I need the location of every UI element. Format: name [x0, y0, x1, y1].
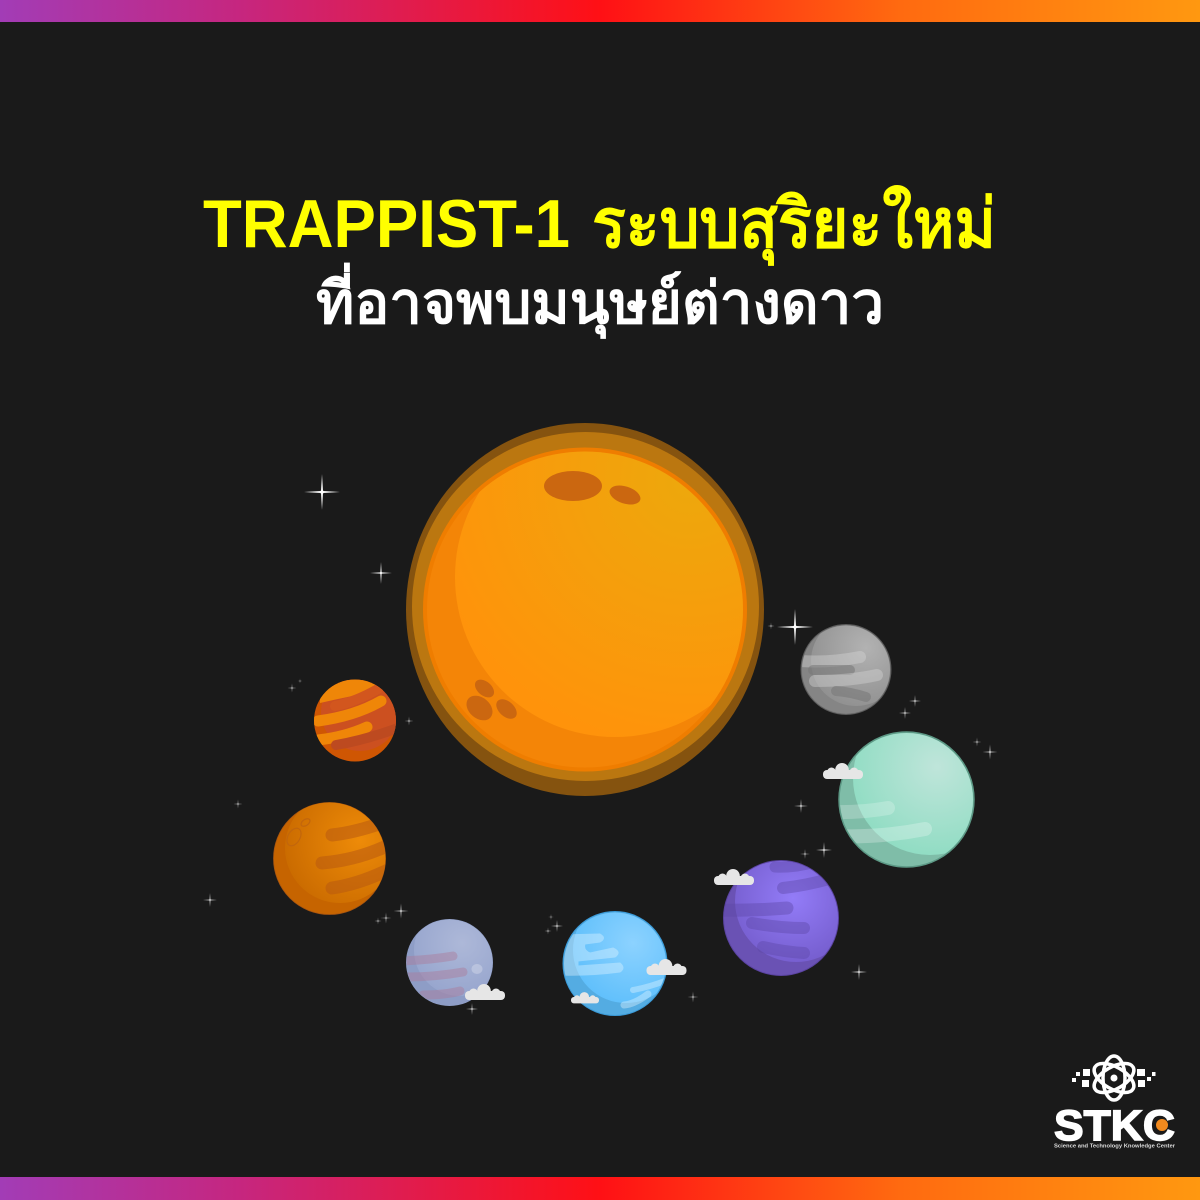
logo tagline: Science and Technology Knowledge Center — [1054, 1144, 1175, 1150]
sun spots — [462, 471, 643, 725]
clouds — [465, 763, 863, 1003]
sun outer halo — [406, 423, 764, 796]
bottom gradient bar — [0, 1177, 1200, 1200]
logo pixels — [1072, 1069, 1156, 1087]
top gradient bar — [0, 0, 1200, 22]
planet: orange — [273, 802, 386, 915]
planet: purple — [723, 860, 839, 976]
planet: gray — [800, 624, 892, 715]
sun body — [427, 452, 743, 768]
title line 1 thai: ระบบสุริยะใหม่ — [592, 184, 996, 266]
logo wordmark: STKC — [1054, 1102, 1175, 1150]
title line 2: ที่อาจพบมนุษย์ต่างดาว — [316, 262, 884, 340]
logo atom icon — [1089, 1056, 1139, 1100]
sun rim — [423, 448, 747, 772]
sun highlight — [455, 452, 743, 737]
title line 1 latin: TRAPPIST-1 — [203, 186, 570, 262]
planet: lilac — [406, 919, 493, 1006]
sun — [406, 417, 775, 796]
title — [203, 184, 996, 340]
logo dot — [1156, 1119, 1168, 1131]
planet: green — [838, 731, 975, 868]
planet: blue — [562, 911, 668, 1016]
logo: STKC — [1054, 1056, 1175, 1150]
star field — [203, 474, 998, 1015]
sun inner halo — [412, 432, 759, 781]
planet: red — [314, 680, 396, 762]
